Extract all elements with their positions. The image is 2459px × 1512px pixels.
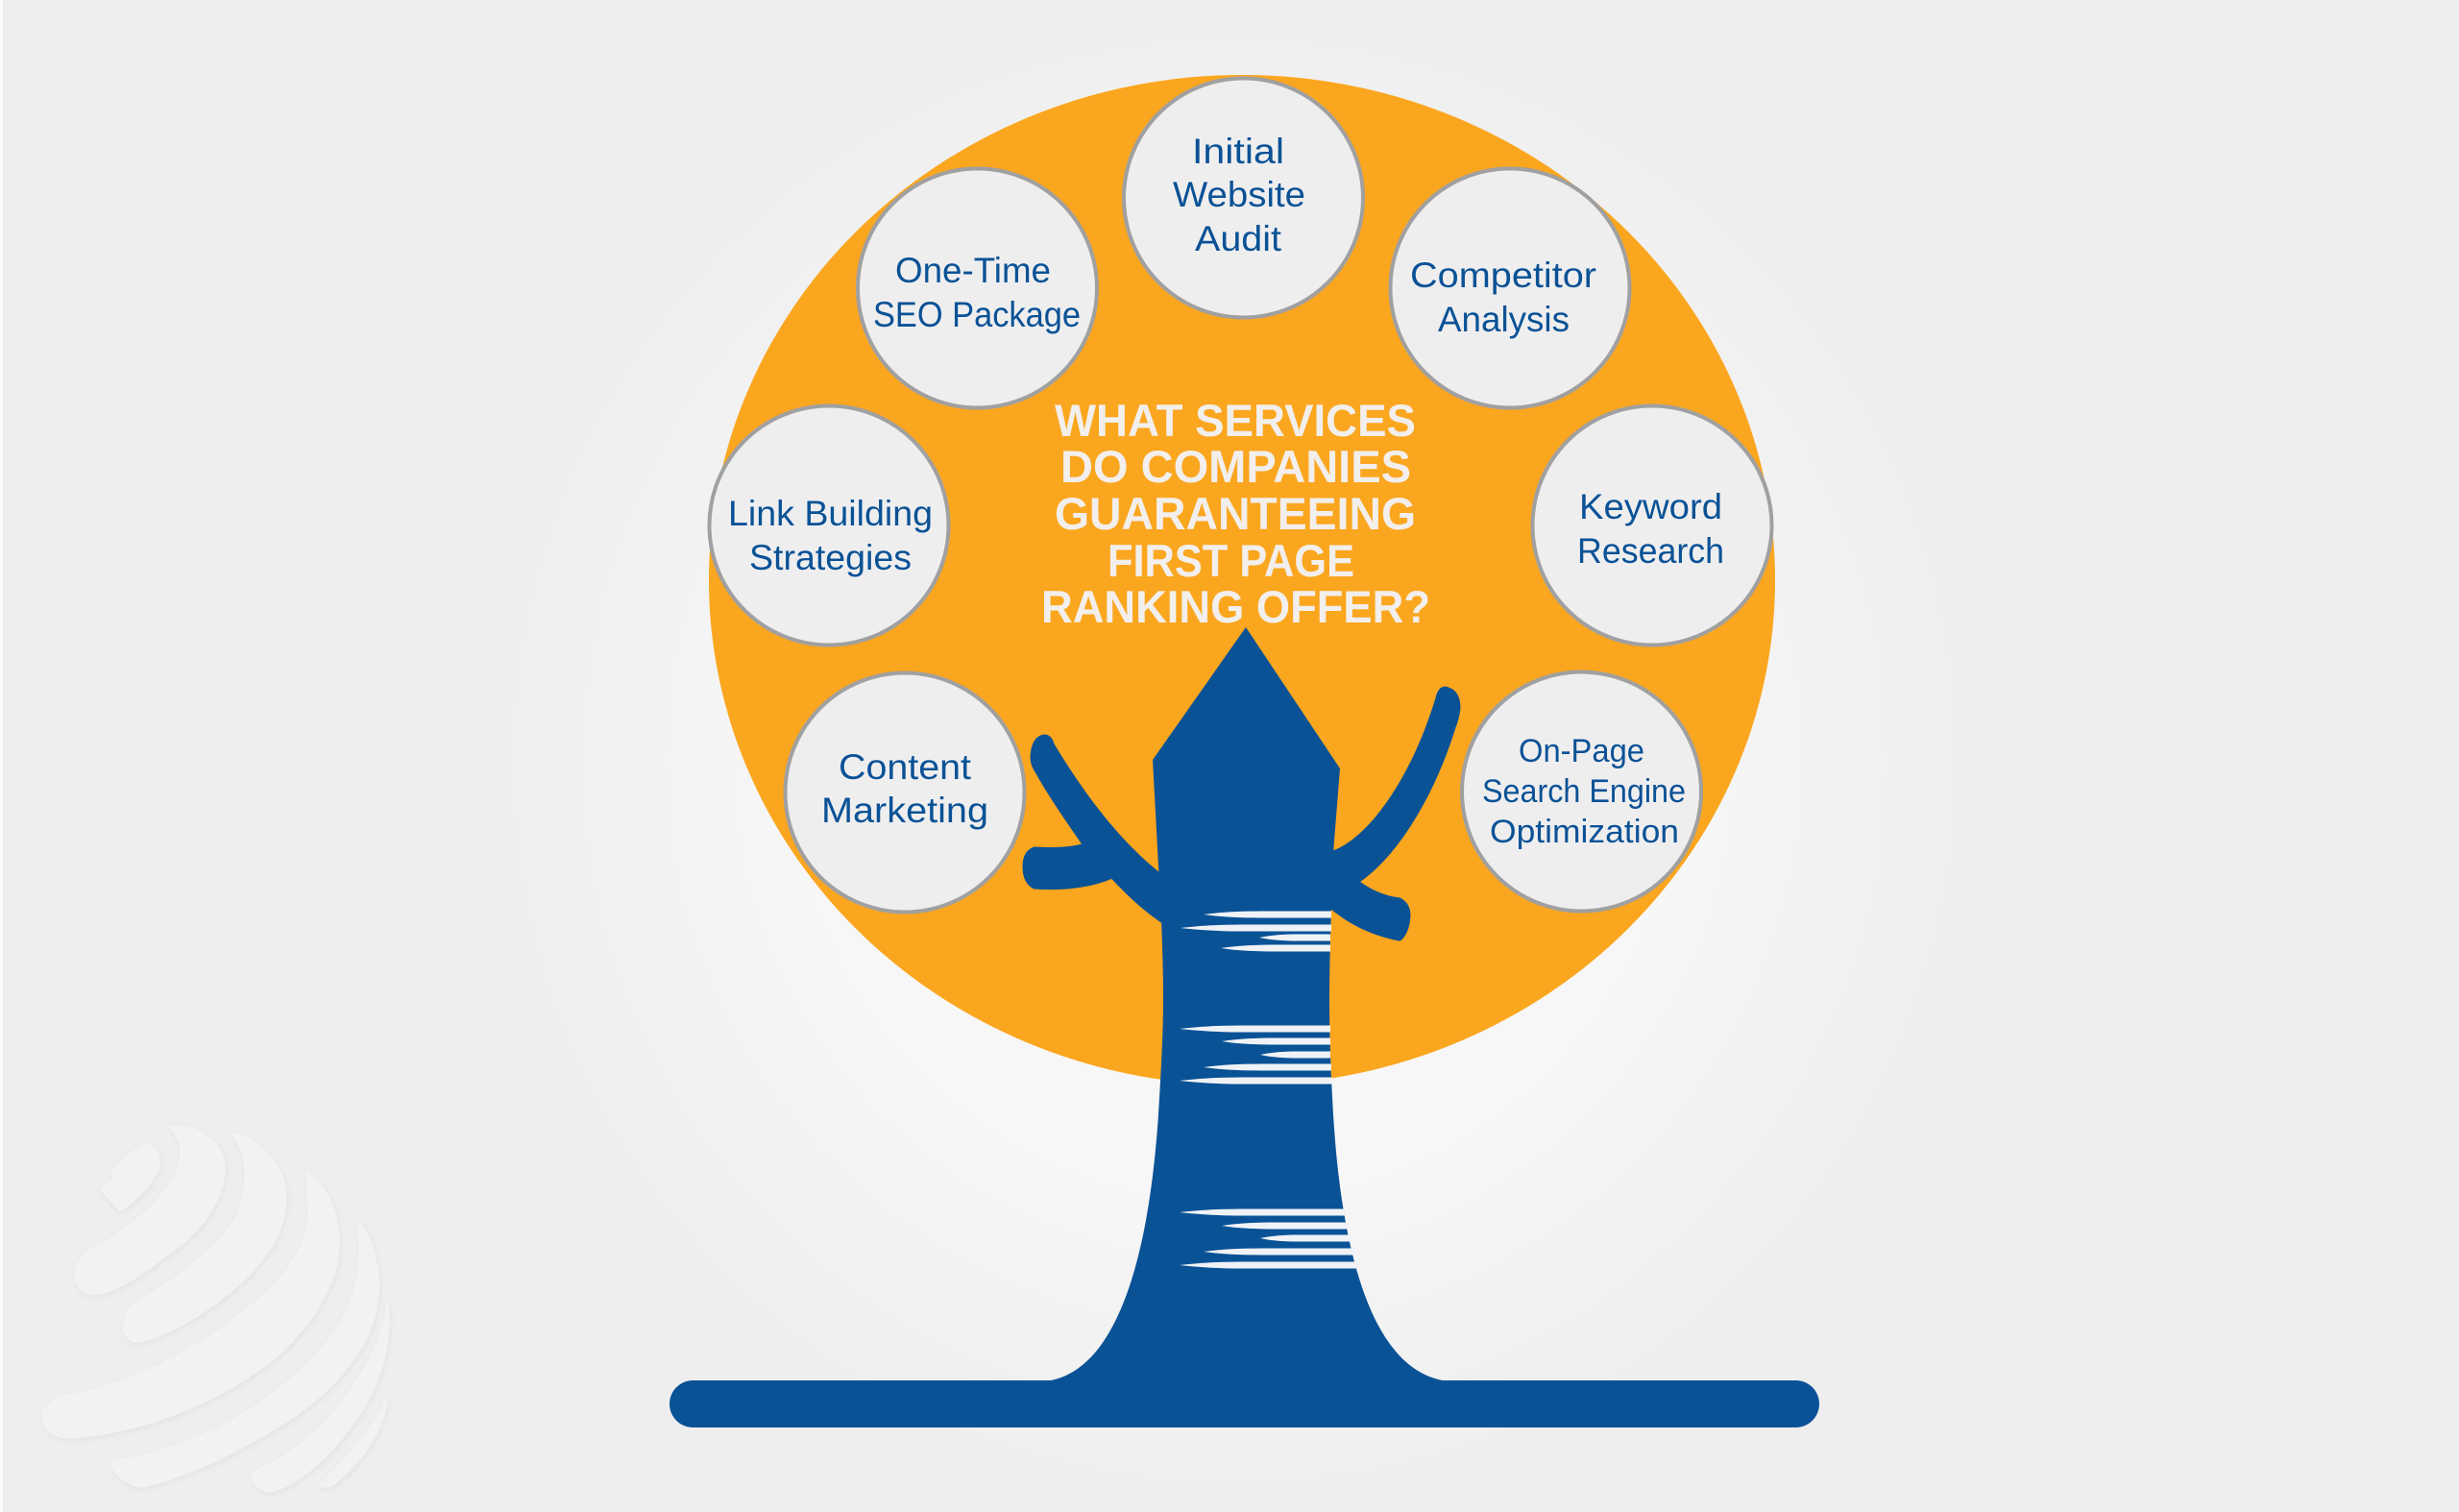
node: Initial Website Audit	[1124, 79, 1363, 317]
title: DO COMPANIES	[1060, 441, 1411, 492]
illustration: tree with branches and trunk	[1025, 627, 1458, 1380]
node: Content Marketing: Marketing	[821, 791, 988, 830]
node: Competitor Analysis: Analysis	[1438, 300, 1570, 339]
node: Content Marketing	[786, 672, 1024, 913]
node: One-Time SEO Package	[858, 169, 1097, 407]
title: RANKING OFFER?	[1041, 581, 1430, 632]
title: WHAT SERVICES	[1055, 395, 1416, 446]
bark stripes: middle group	[1180, 1026, 1332, 1084]
panel: orange tree canopy	[709, 75, 1775, 1085]
node: On-Page Search Engine Optimization: On-Page	[1519, 733, 1644, 769]
node: Initial Website Audit: Website	[1173, 175, 1305, 214]
right branch	[1329, 689, 1458, 939]
node: Keyword Research: Research	[1577, 531, 1724, 571]
title	[1041, 395, 1430, 632]
node: Link Building Strategies: Link Building	[728, 494, 933, 533]
node: One-Time SEO Package: One-Time	[895, 251, 1051, 290]
bark stripes: upper group	[1181, 911, 1331, 951]
node: On-Page Search Engine Optimization: Search Engine	[1482, 773, 1686, 810]
node: On-Page Search Engine Optimization: Optimization	[1490, 814, 1679, 850]
node: Initial Website Audit: Audit	[1195, 219, 1282, 258]
icon: faint globe watermark	[43, 1127, 388, 1491]
title: GUARANTEEING	[1055, 488, 1416, 539]
node: Content Marketing: Content	[839, 747, 972, 787]
node: Keyword Research	[1533, 405, 1771, 646]
title: FIRST PAGE	[1108, 535, 1354, 586]
left branch	[1025, 737, 1166, 923]
node: Link Building Strategies: Strategies	[749, 538, 912, 577]
node: One-Time SEO Package: SEO Package	[873, 295, 1081, 334]
node: Link Building Strategies	[709, 405, 949, 646]
node: Initial Website Audit: Initial	[1192, 132, 1284, 171]
node: On-Page Search Engine Optimization	[1462, 672, 1701, 911]
bark stripes: lower group	[1180, 1208, 1359, 1268]
trunk with arrow tip	[1051, 627, 1443, 1380]
node: Competitor Analysis: Competitor	[1410, 256, 1596, 295]
node: Keyword Research: Keyword	[1579, 487, 1722, 526]
node: Competitor Analysis	[1391, 169, 1629, 407]
ground bar	[670, 1380, 1819, 1427]
